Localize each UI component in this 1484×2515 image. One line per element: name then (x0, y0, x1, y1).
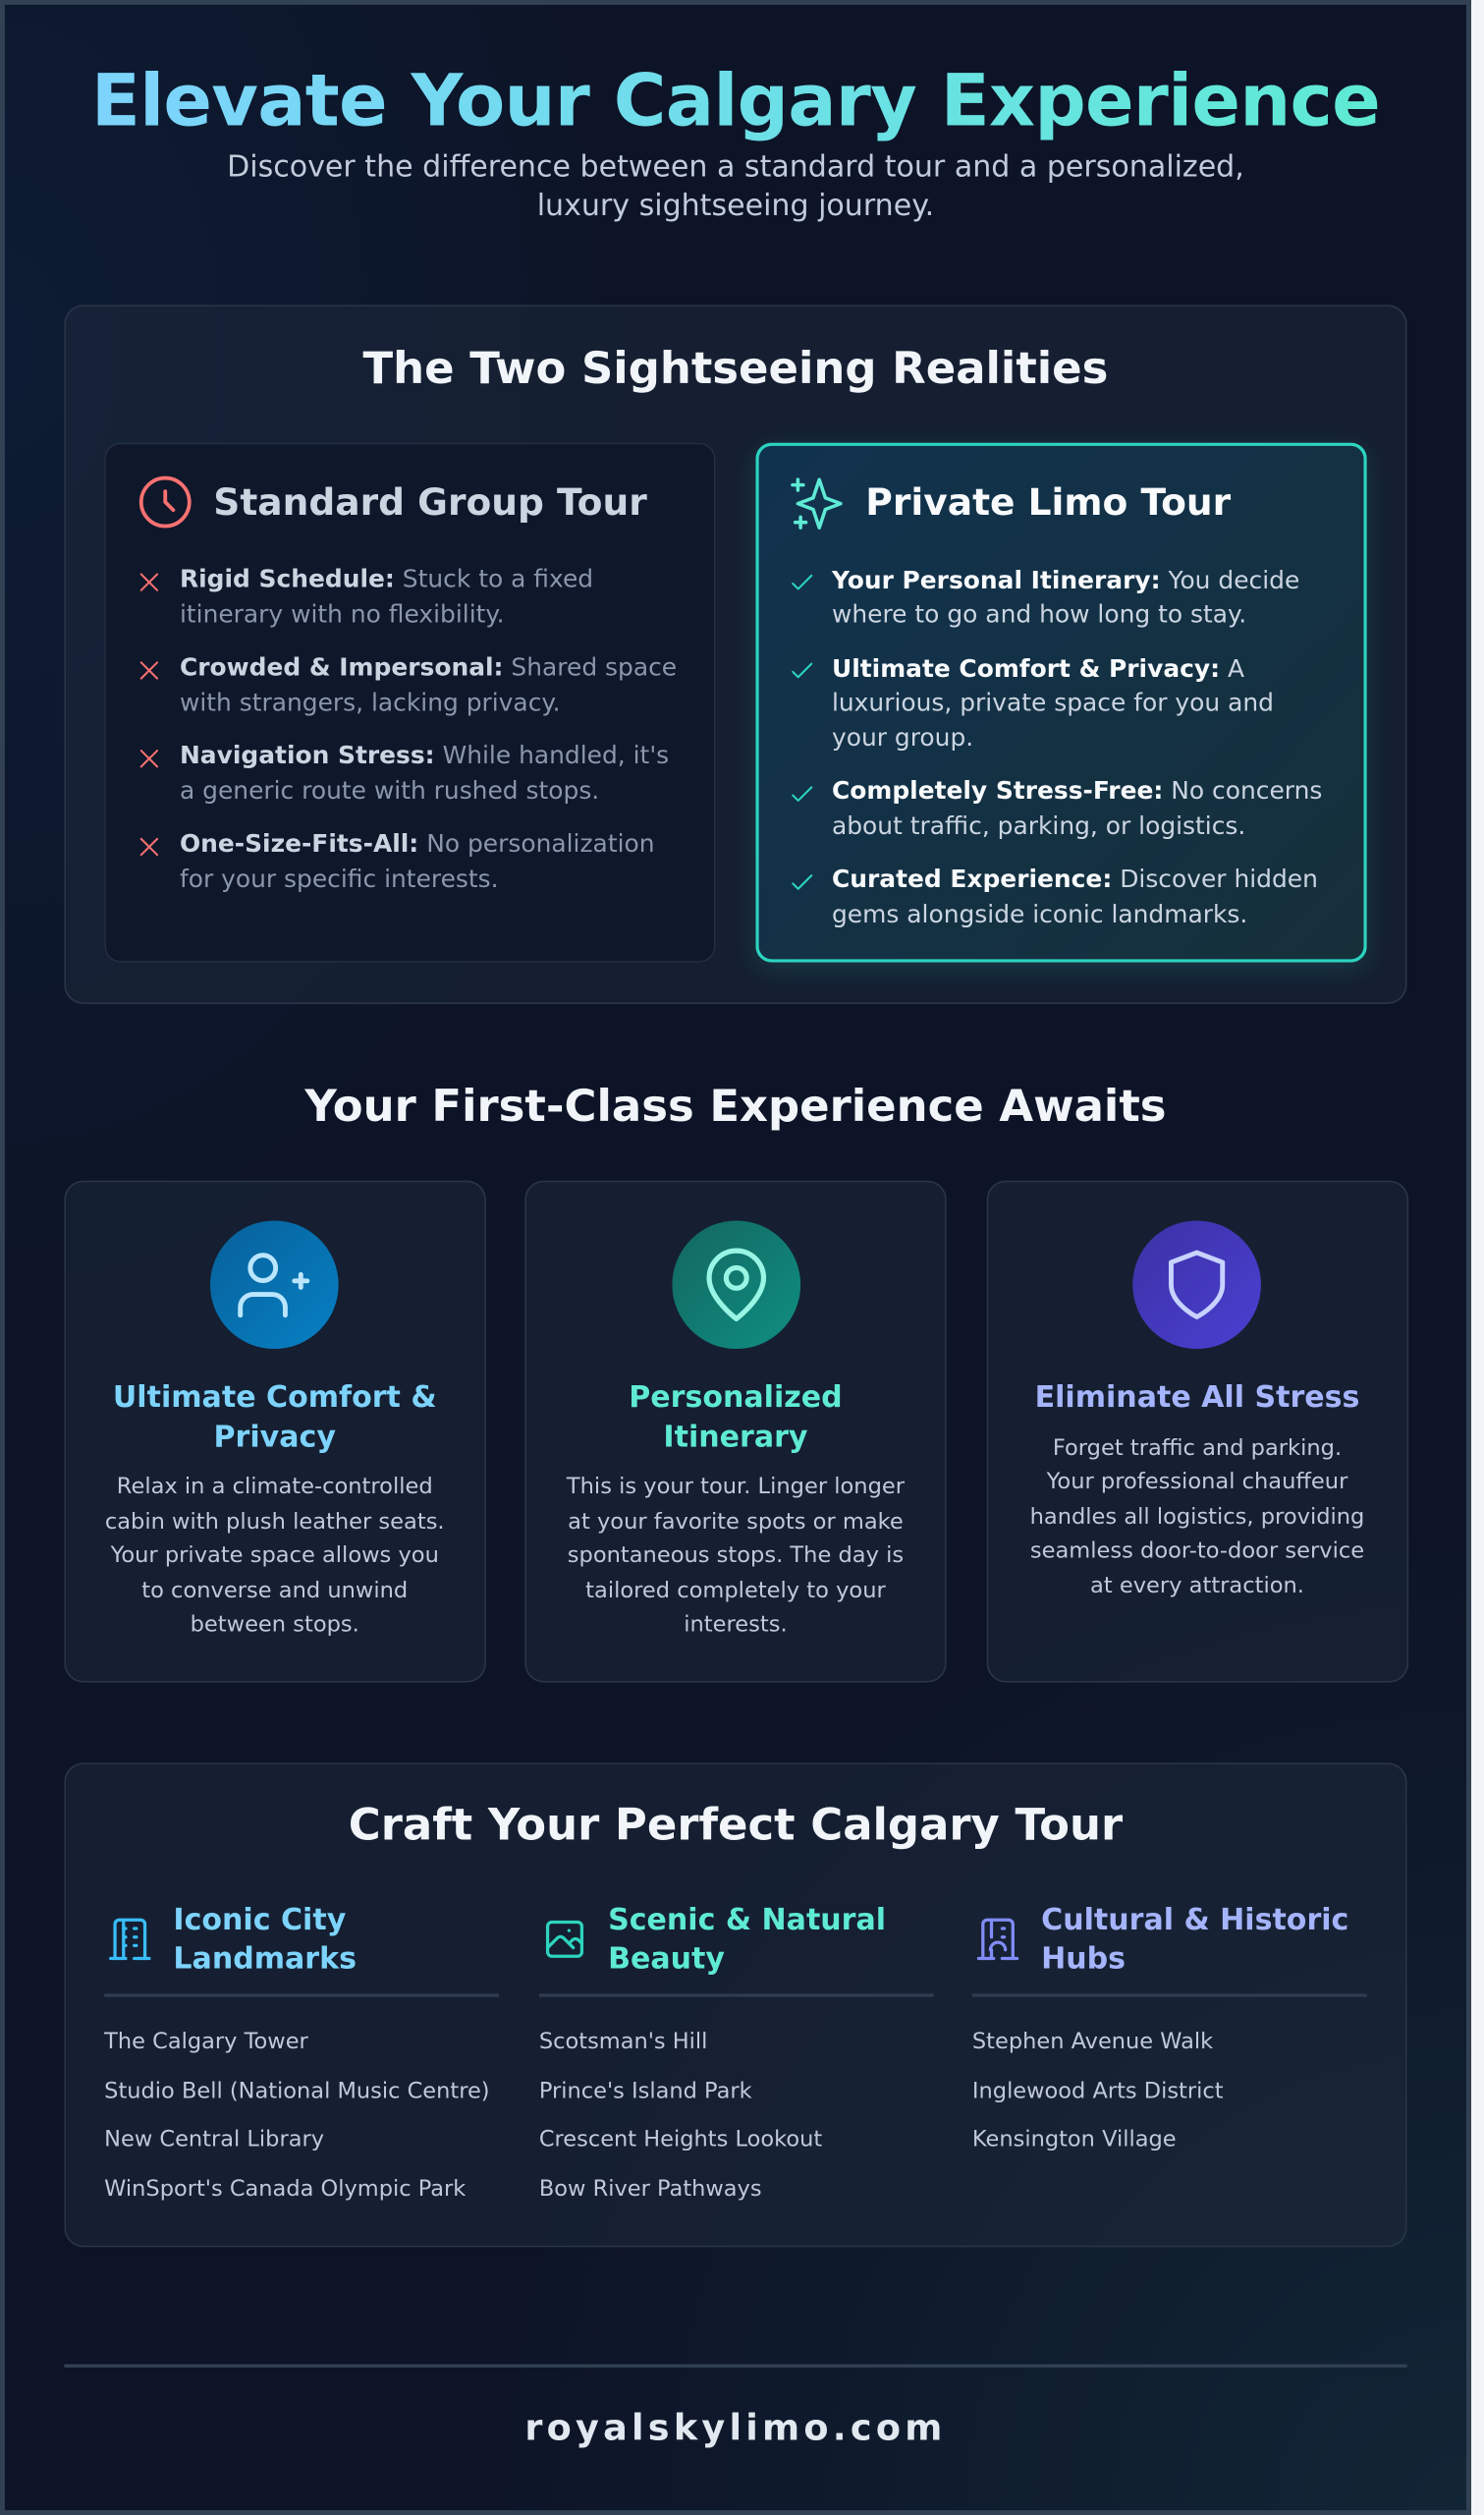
card text: Your professional chauffeur (1047, 1470, 1347, 1495)
heading: craft your tour: Craft Your Perfect Calgary Tour (349, 1800, 1123, 1851)
column: cultural and historic hubs (972, 1904, 1367, 2152)
list: landmarks: WinSport's Canada Olympic Park (104, 2176, 466, 2202)
panel: craft your perfect calgary tour (64, 1762, 1407, 2247)
card text: Your private space allows you (111, 1543, 439, 1569)
item: stress-free: about traffic, parking, or logistics. (832, 810, 1245, 840)
column heading: Scenic & Natural (608, 1904, 886, 1937)
subtitle (227, 150, 1244, 222)
column heading: Iconic City (173, 1904, 346, 1937)
item: comfort and privacy: Ultimate Comfort & Privacy: A (832, 653, 1244, 683)
list: scenic spots: Prince's Island Park (539, 2078, 752, 2103)
card text: tailored completely to your (585, 1578, 886, 1603)
item: crowded and impersonal: with strangers, lacking privacy. (180, 688, 561, 716)
card text: handles all logistics, providing (1030, 1504, 1364, 1530)
card text: spontaneous stops. The day is (568, 1543, 904, 1569)
card heading (113, 1381, 437, 1454)
item: one size fits all: for your specific interests. (180, 864, 499, 893)
item: personal itinerary (792, 566, 1299, 629)
item: rigid schedule: Rigid Schedule: Stuck to a fixed (180, 565, 593, 593)
item: crowded and impersonal: Crowded & Impersonal: Shared space (180, 652, 677, 682)
panel: standard group tour (104, 443, 716, 963)
list: cultural spots: Kensington Village (972, 2127, 1177, 2152)
heading: private limo tour: Private Limo Tour (865, 482, 1231, 524)
footer divider (64, 2365, 1407, 2368)
item: comfort and privacy: luxurious, private space for you and (832, 688, 1274, 717)
list: landmarks: Studio Bell (National Music Centre) (104, 2078, 490, 2103)
item: one size fits all: One-Size-Fits-All: No personalization (180, 829, 655, 858)
item: navigation stress (139, 741, 669, 805)
panel: personalized itinerary (524, 1181, 947, 1683)
list: landmarks: New Central Library (104, 2127, 324, 2152)
item: rigid schedule: itinerary with no flexibility. (180, 599, 505, 628)
card heading: Ultimate Comfort & (113, 1381, 437, 1415)
item: personal itinerary: where to go and how long to stay. (832, 600, 1246, 629)
panel: ultimate comfort and privacy (64, 1181, 485, 1683)
list: landmarks (104, 2029, 490, 2202)
item: personal itinerary: Your Personal Itinerary: You decide (832, 566, 1299, 594)
item: stress-free (792, 776, 1322, 840)
subtitle: Discover the difference between a standard tour and a personalized, (227, 150, 1244, 184)
card text: to converse and unwind (141, 1578, 408, 1603)
list: scenic spots: Bow River Pathways (539, 2176, 762, 2202)
item: navigation stress: a generic route with rushed stops. (180, 775, 599, 805)
heading: first-class experience: Your First-Class Experience Awaits (304, 1081, 1167, 1132)
card heading (629, 1381, 843, 1454)
column heading: Cultural & Historic (1041, 1904, 1348, 1937)
card heading: Privacy (214, 1421, 336, 1454)
column: scenic and natural beauty (539, 1904, 934, 2202)
list: cultural spots (972, 2029, 1224, 2152)
list: cultural spots: Inglewood Arts District (972, 2078, 1224, 2103)
card heading: Eliminate All Stress (1035, 1381, 1359, 1415)
card text (105, 1474, 445, 1638)
item: curated experience: Curated Experience: Discover hidden (832, 865, 1318, 893)
card text: This is your tour. Linger longer (567, 1474, 905, 1500)
card text: cabin with plush leather seats. (105, 1509, 445, 1535)
panel: eliminate all stress (987, 1181, 1407, 1683)
column: iconic city landmarks (104, 1904, 499, 2202)
card text: at every attraction. (1090, 1573, 1304, 1598)
list: scenic spots (539, 2029, 822, 2202)
list: standard tour drawbacks (139, 565, 677, 893)
list: scenic spots: Scotsman's Hill (539, 2029, 707, 2054)
list: scenic spots: Crescent Heights Lookout (539, 2127, 822, 2152)
icon: landscape photo (546, 1920, 583, 1958)
item: comfort and privacy: your group. (832, 723, 973, 752)
item: comfort and privacy (792, 653, 1274, 752)
divider (972, 1993, 1367, 1997)
title: Elevate Your Calgary Experience (91, 57, 1380, 141)
item: one size fits all (139, 829, 655, 893)
list: private tour benefits (792, 566, 1322, 927)
item: curated experience (792, 865, 1318, 927)
icon: building (109, 1918, 151, 1961)
column heading: Beauty (608, 1943, 725, 1977)
item: rigid schedule (139, 565, 593, 628)
heading: standard group tour: Standard Group Tour (213, 482, 647, 524)
column heading (173, 1904, 357, 1977)
list: landmarks: The Calgary Tower (104, 2029, 308, 2054)
footer website: royalskylimo.com (524, 2407, 947, 2448)
heading: the two sightseeing realities: The Two Sightseeing Realities (363, 343, 1108, 394)
icon: user plus (210, 1220, 339, 1349)
divider (104, 1993, 499, 1997)
column heading: Landmarks (173, 1943, 357, 1977)
icon: historic building (976, 1918, 1019, 1961)
list: cultural spots: Stephen Avenue Walk (972, 2029, 1213, 2054)
card text: interests. (684, 1612, 788, 1638)
card heading: Itinerary (663, 1421, 807, 1454)
card text: at your favorite spots or make (568, 1509, 904, 1535)
panel: private limo tour (755, 443, 1367, 963)
divider (539, 1993, 934, 1997)
item: stress-free: Completely Stress-Free: No concerns (832, 776, 1322, 806)
item: crowded and impersonal (139, 652, 677, 716)
icon: sparkles (791, 477, 843, 530)
subtitle: luxury sightseeing journey. (537, 189, 934, 222)
panel: the two sightseeing realities (64, 305, 1407, 1003)
item: navigation stress: Navigation Stress: While handled, it's (180, 741, 669, 770)
column heading (1041, 1904, 1348, 1977)
icon: map pin (672, 1220, 799, 1349)
card text (1030, 1435, 1364, 1598)
column heading (608, 1904, 886, 1977)
card text (566, 1474, 905, 1638)
card text: between stops. (191, 1612, 359, 1638)
card text: Forget traffic and parking. (1053, 1435, 1342, 1461)
item: curated experience: gems alongside iconic landmarks. (832, 899, 1247, 927)
icon: shield (1132, 1220, 1261, 1349)
column heading: Hubs (1041, 1943, 1126, 1977)
card text: seamless door-to-door service (1030, 1538, 1364, 1564)
icon: clock (139, 475, 192, 529)
card heading: Personalized (629, 1381, 843, 1415)
card text: Relax in a climate-controlled (117, 1474, 433, 1500)
